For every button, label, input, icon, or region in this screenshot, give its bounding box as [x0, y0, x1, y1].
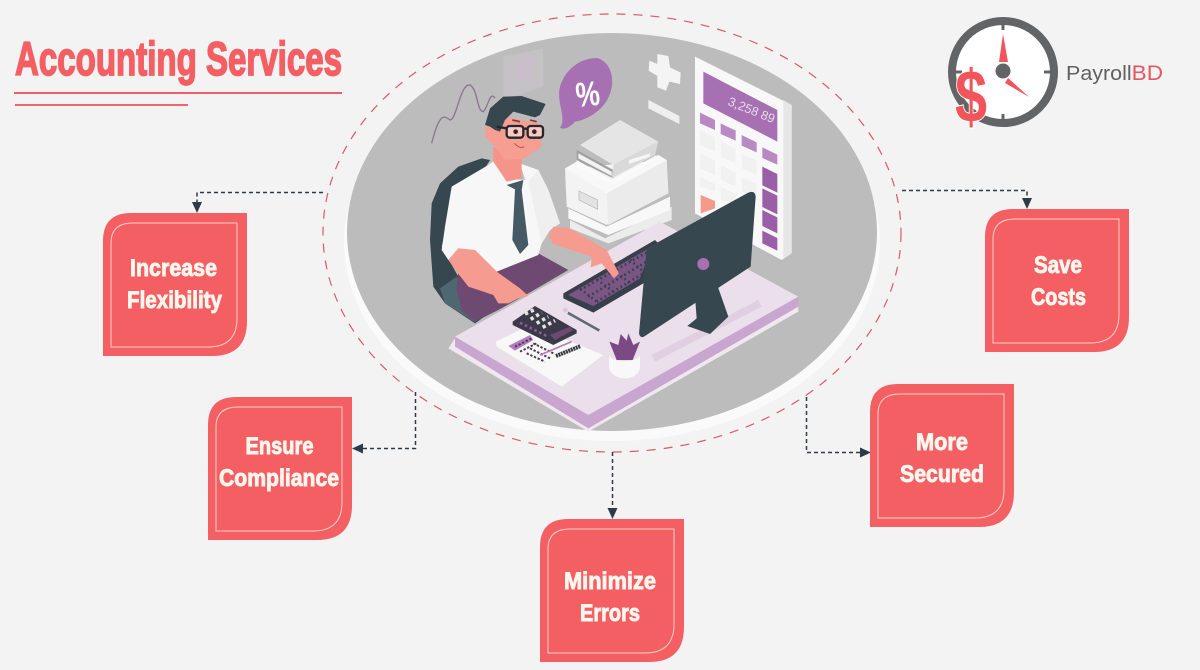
keyboard [563, 240, 658, 313]
tie [507, 180, 528, 254]
stacked boxes and binders [565, 120, 672, 243]
card: Ensure Compliance [208, 397, 352, 540]
illustration: accountant at desk [430, 48, 798, 432]
hair [485, 96, 546, 132]
glasses [497, 126, 543, 138]
card: Increase Flexibility: Increase [130, 255, 217, 282]
face [485, 117, 542, 160]
card: More Secured [870, 384, 1014, 527]
card: Increase Flexibility: Flexibility [127, 287, 223, 314]
pen [563, 308, 600, 332]
right arm and hand [548, 227, 619, 278]
card: Minimize Errors: Minimize [564, 568, 656, 595]
logo: PayrollBD [952, 21, 1163, 138]
shirt [442, 160, 560, 272]
wall chart [432, 48, 543, 143]
connector: More Secured [806, 397, 871, 458]
card: Minimize Errors: Errors [580, 600, 640, 627]
percent bubble [559, 58, 612, 129]
person body [442, 96, 568, 322]
handheld calculator [513, 306, 577, 345]
left arm [448, 248, 528, 303]
plus and minus icons [648, 54, 681, 124]
card: Save Costs [985, 209, 1129, 352]
desk [448, 222, 798, 432]
chair [430, 158, 498, 323]
wall calculator [695, 57, 792, 260]
paper report [496, 325, 603, 389]
card: More Secured: More [916, 429, 968, 456]
connector: Save Costs [902, 190, 1032, 209]
title: Accounting Services [15, 32, 342, 85]
connector: Minimize Errors [608, 452, 618, 519]
card: More Secured: Secured [900, 461, 984, 488]
wall calculator: 3,258 89 [726, 95, 777, 126]
card: Minimize Errors [540, 519, 684, 662]
central illustration circle [323, 14, 901, 452]
logo: PayrollBD: PayrollBD [1066, 62, 1163, 85]
potted plant [609, 333, 640, 378]
connector: Increase Flexibility [192, 192, 323, 213]
trousers [457, 253, 568, 322]
card: Ensure Compliance: Ensure [246, 433, 314, 460]
card: Save Costs: Save [1034, 252, 1082, 279]
card: Save Costs: Costs [1031, 284, 1086, 311]
card: Ensure Compliance: Compliance [219, 465, 339, 492]
computer monitor [639, 192, 756, 337]
connector: Ensure Compliance [352, 392, 416, 454]
percent bubble: % [574, 75, 602, 115]
neck [493, 147, 522, 182]
logo: PayrollBD: $ [955, 55, 987, 138]
card: Increase Flexibility [103, 213, 247, 356]
